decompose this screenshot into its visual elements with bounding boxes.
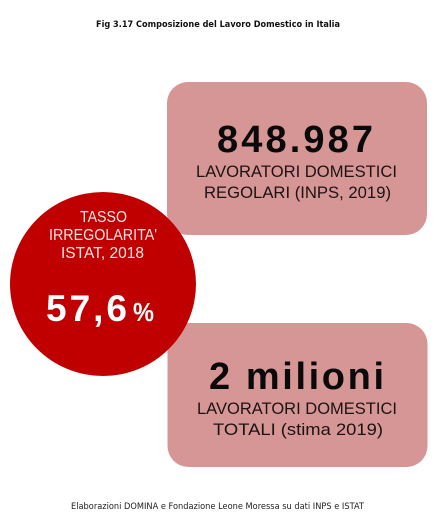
label: regular workers: LAVORATORI DOMESTICI [196,162,397,181]
label: irregularity rate: TASSO [80,209,127,226]
label: irregularity rate: IRREGOLARITA' [49,227,157,244]
circle: irregularity rate [10,192,196,376]
source note: Elaborazioni DOMINA e Fondazione Leone Moressa su dati INPS e ISTAT [71,502,364,512]
label: regular workers [196,162,397,202]
panel: regular domestic workers [167,82,427,235]
title: Fig 3.17 Composizione del Lavoro Domestico in Italia [96,20,340,30]
number: 848.987: 848.987 [217,119,373,161]
label: total workers: LAVORATORI DOMESTICI [197,399,397,418]
label: total workers: TOTALI (stima 2019) [213,420,383,439]
value: 57,6%: 57,6 [46,288,127,329]
label: irregularity rate: ISTAT, 2018 [61,245,144,262]
label: total workers [197,399,397,439]
number: 2 milioni: 2 milioni [209,356,384,398]
label: regular workers: REGOLARI (INPS, 2019) [204,183,391,202]
panel: total domestic workers [168,323,428,467]
label: irregularity rate [49,209,157,262]
value: 57,6%: % [133,297,154,327]
